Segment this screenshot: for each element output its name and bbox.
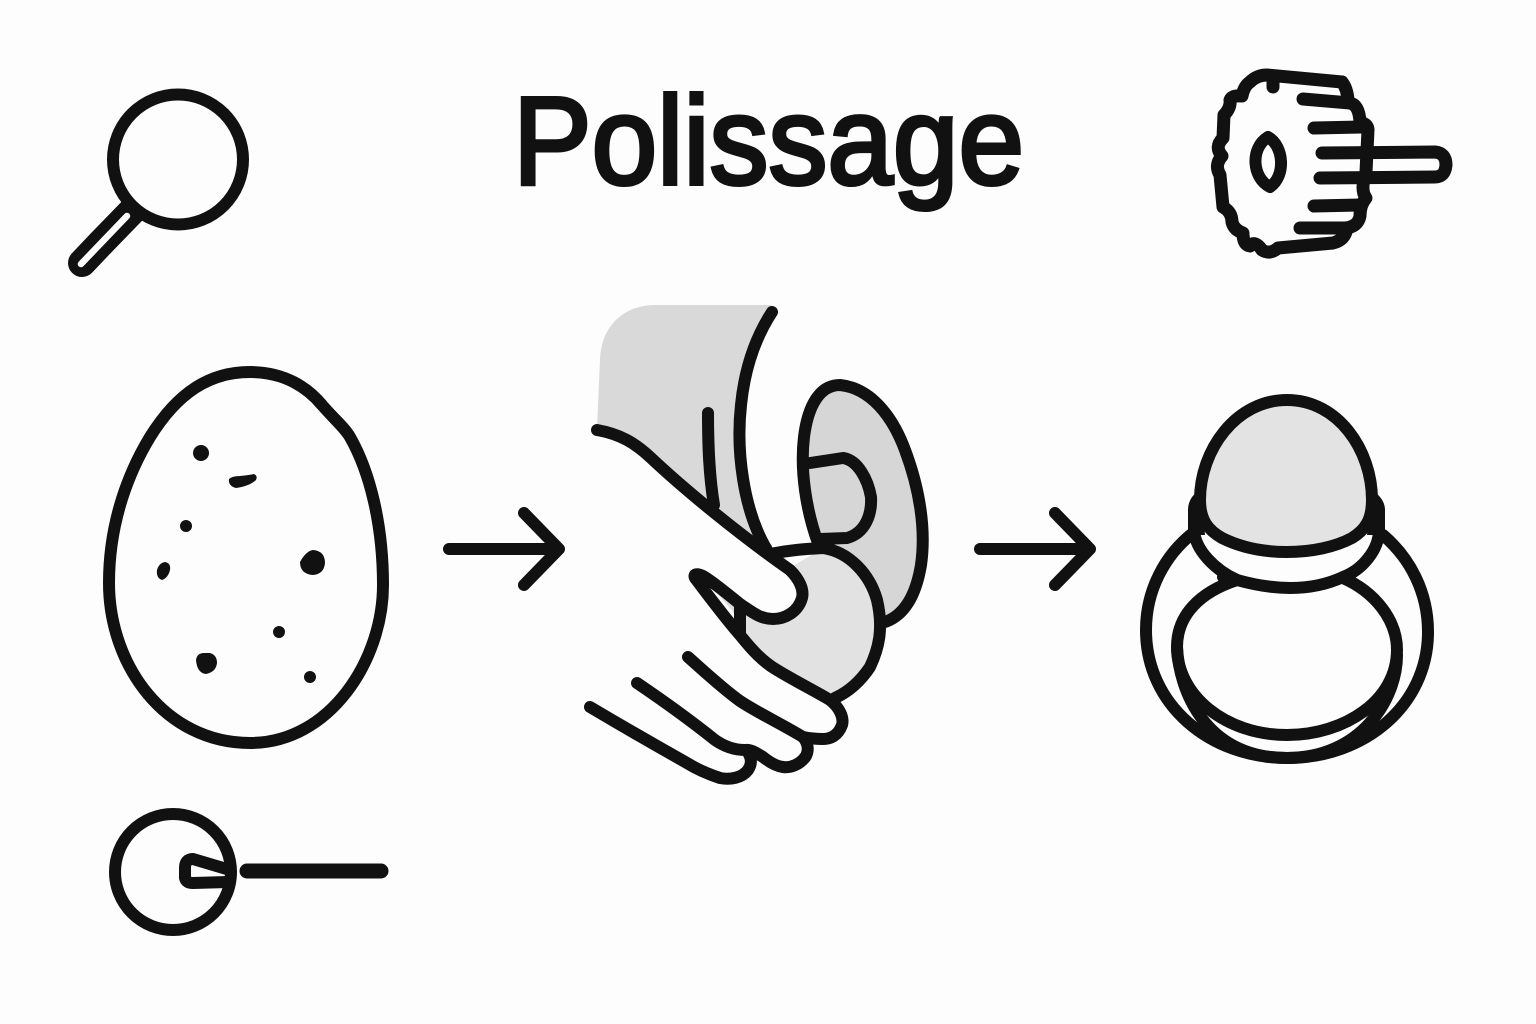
icon: polishing wheel [1217, 75, 1446, 252]
hand upper edge and thumb [597, 430, 830, 700]
inner band [1177, 578, 1397, 735]
arrow: stone to polishing [449, 513, 559, 585]
icon: rough gemstone [109, 372, 383, 743]
stone outlines [770, 548, 880, 698]
specks on the stone [157, 445, 325, 683]
loop outlines [803, 385, 923, 622]
cloth fill [597, 305, 772, 552]
arrow: polishing to ring [980, 513, 1090, 585]
icon: ring with polished cabochon [1146, 400, 1428, 758]
cloth outlines [739, 312, 772, 550]
icon: magnifying glass [81, 94, 243, 264]
setting collar [1194, 530, 1379, 588]
fingers [688, 657, 842, 739]
icon: hand polishing with cloth [590, 305, 923, 779]
band inner rim [1177, 647, 1397, 758]
stone [1200, 400, 1372, 552]
polished stone fill [740, 548, 880, 698]
outer band [1146, 533, 1428, 758]
cloth loop fill [803, 385, 923, 622]
title: Polissage [513, 72, 1024, 211]
icon: small lens with handle [115, 814, 381, 930]
